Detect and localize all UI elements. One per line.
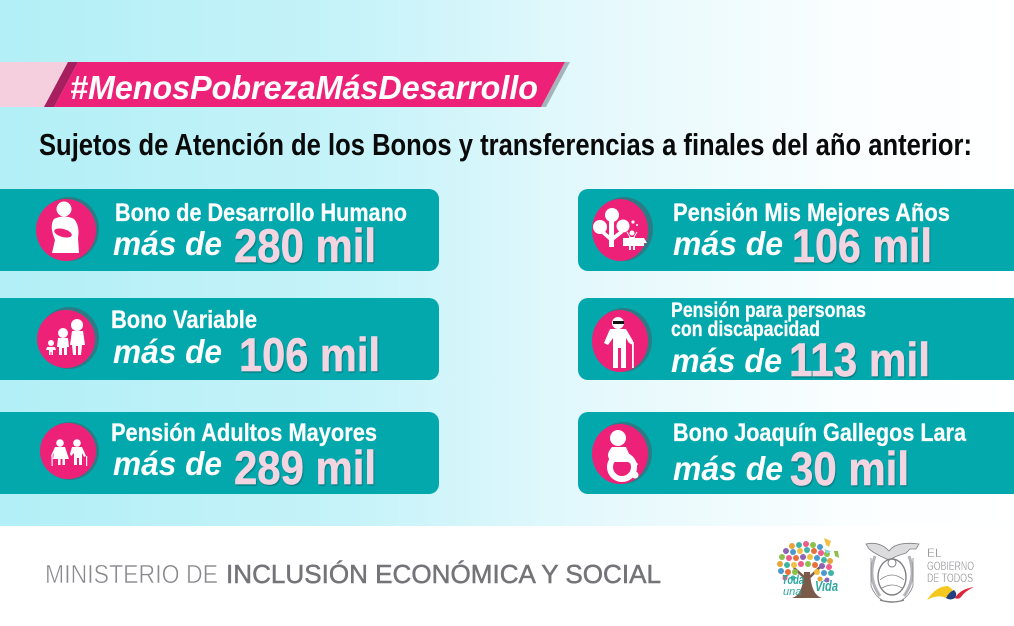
logo: El Gobierno de Todos: DE TODOS	[927, 571, 973, 585]
panel: Pensión Mis Mejores Años	[578, 189, 1014, 272]
logo: El Gobierno de Todos: EL	[927, 546, 942, 560]
logo: El Gobierno de Todos	[927, 546, 974, 600]
footer ministry name bold: INCLUSIÓN ECONÓMICA Y SOCIAL	[226, 559, 661, 589]
icon: mother with baby	[36, 197, 99, 261]
panel: Pensión Adultos Mayores: más de	[113, 445, 222, 482]
panel: Bono Variable	[0, 298, 439, 381]
icon: tree and bench	[592, 197, 653, 261]
logo: Toda una Vida tree: Vida	[815, 578, 838, 595]
panel: Bono Variable: más de	[113, 333, 222, 370]
panel: Pensión Mis Mejores Años: 106 mil	[792, 219, 932, 272]
icon: family	[37, 307, 99, 369]
panel: Bono Variable: Bono Variable	[111, 306, 257, 334]
panel: Pensión Mis Mejores Años: más de	[673, 225, 783, 262]
panel: Pensión para personas con discapacidad: 113 mil	[789, 333, 930, 386]
panel: Pensión para personas con discapacidad: con discapacidad	[671, 318, 820, 341]
panel: Pensión para personas con discapacidad: Pensión para personas	[671, 299, 866, 322]
panel: Bono Joaquín Gallegos Lara: 30 mil	[790, 442, 909, 495]
footer ministry name: MINISTERIO DE	[45, 559, 218, 589]
panel: Bono de Desarrollo Humano: 280 mil	[234, 219, 376, 272]
panel: Bono de Desarrollo Humano: más de	[113, 225, 222, 262]
panel: Pensión Adultos Mayores	[0, 412, 439, 494]
logo: Toda una Vida tree: una	[783, 586, 801, 598]
panel: Pensión para personas con discapacidad: más de	[671, 342, 782, 379]
panel: Bono de Desarrollo Humano	[0, 189, 439, 272]
logo: El Gobierno de Todos: GOBIERNO	[927, 559, 974, 573]
icon: wheelchair user	[592, 422, 652, 484]
panel: Bono Joaquín Gallegos Lara	[578, 412, 1014, 495]
panel: Pensión Adultos Mayores: 289 mil	[234, 441, 376, 494]
panel: Pensión Mis Mejores Años: Pensión Mis Mejores Años	[673, 199, 950, 227]
panel: Bono Variable: 106 mil	[239, 328, 380, 381]
panel: Bono de Desarrollo Humano: Bono de Desarrollo Humano	[115, 199, 407, 227]
footer band	[0, 526, 1014, 626]
logo: Toda una Vida tree: Toda	[782, 572, 804, 587]
panel: Bono Joaquín Gallegos Lara: más de	[673, 450, 783, 487]
hashtag banner: #MenosPobrezaMásDesarrollo	[70, 69, 538, 106]
icon: person with cane	[592, 308, 652, 372]
logo: Toda una Vida tree	[777, 538, 839, 598]
hashtag banner	[0, 62, 570, 107]
panel: Bono Joaquín Gallegos Lara: Bono Joaquín Gallegos Lara	[673, 419, 967, 447]
icon: elderly couple	[40, 422, 99, 480]
panel: Pensión para personas con discapacidad	[578, 298, 1014, 386]
panel: Pensión Adultos Mayores: Pensión Adultos Mayores	[111, 419, 377, 447]
logo: coat of arms	[866, 543, 919, 602]
